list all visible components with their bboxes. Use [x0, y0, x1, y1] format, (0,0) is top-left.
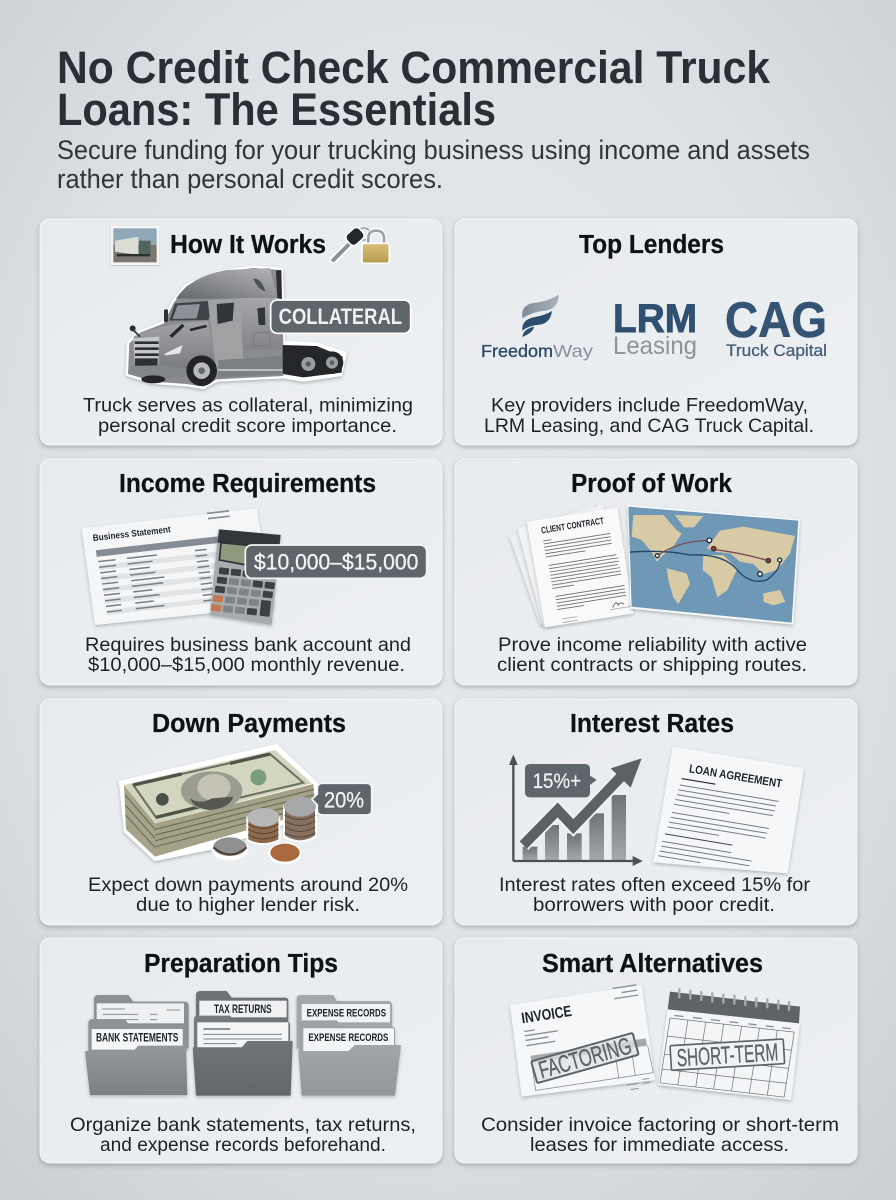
heading: interest rates: Interest Rates — [570, 710, 734, 738]
label: 20% — [312, 783, 372, 815]
panel: proof of work — [455, 459, 857, 685]
logo: FreedomWay: Freedom — [481, 341, 553, 361]
icon: truck photo — [111, 226, 159, 265]
calculator — [210, 529, 281, 625]
description: preparation tips: and expense records beforehand. — [100, 1134, 386, 1156]
invoice with factoring stamp — [510, 984, 655, 1104]
description: how it works — [83, 394, 413, 437]
description: income requirements — [85, 634, 411, 676]
logo: LRM Leasing: LRM — [613, 297, 697, 341]
illustration: contract and map — [509, 503, 803, 627]
label: revenue range: $10,000–$15,000 — [254, 549, 418, 574]
label: collateral — [271, 300, 411, 333]
logo: LRM Leasing: Leasing — [613, 332, 697, 360]
heading: proof of work: Proof of Work — [571, 470, 733, 498]
loan agreement document: LOAN AGREEMENT — [688, 762, 783, 791]
client contract stack: CLIENT CONTRACT — [540, 516, 605, 535]
illustration: statement and calculator — [82, 508, 427, 625]
truck — [128, 268, 344, 387]
description: preparation tips — [70, 1114, 416, 1156]
subtitle — [57, 135, 810, 194]
cash stack — [120, 745, 318, 860]
description: income requirements: Requires business bank account and — [85, 634, 411, 656]
description: proof of work — [497, 634, 807, 676]
logo: CAG Truck Capital: Truck Capital — [726, 342, 827, 360]
subtitle: rather than personal credit scores. — [57, 164, 443, 194]
folder: expense records: EXPENSE RECORDS — [307, 1007, 386, 1019]
shipping route map — [627, 503, 803, 627]
label: 15%+ — [525, 764, 597, 797]
description: top lenders: Key providers include FreedomWay, — [491, 394, 808, 416]
description: interest rates: borrowers with poor credit. — [533, 894, 775, 916]
description: down payments — [88, 874, 408, 916]
description: interest rates: Interest rates often exceed 15% for — [499, 874, 811, 896]
title line 2: Loans: The Essentials — [57, 84, 496, 135]
title: No Credit Check Commercial Truck — [57, 42, 771, 93]
description: top lenders — [484, 394, 814, 437]
folder: tax returns — [193, 991, 293, 1096]
description: proof of work: client contracts or shipping routes. — [497, 654, 807, 676]
business statement document — [82, 508, 273, 625]
invoice with factoring stamp: FACTORING — [536, 1033, 635, 1084]
panel: top lenders — [455, 219, 857, 445]
illustration: cash and coins — [120, 745, 372, 864]
heading: down payments: Down Payments — [152, 710, 346, 738]
description: down payments: Expect down payments around 20% — [88, 874, 408, 896]
description: smart alternatives — [481, 1114, 839, 1156]
client contract stack — [509, 503, 633, 627]
description: how it works: Truck serves as collateral, minimizing — [83, 394, 413, 416]
heading: how it works: How It Works — [170, 231, 326, 259]
panel: down payments — [40, 699, 442, 925]
panel: smart alternatives — [455, 938, 857, 1163]
loan agreement document — [653, 747, 804, 874]
description: smart alternatives: Consider invoice factoring or short-term — [481, 1114, 839, 1136]
description: how it works: personal credit score importance. — [98, 415, 397, 437]
description: proof of work: Prove income reliability with active — [498, 634, 807, 656]
panel: preparation tips — [40, 938, 442, 1163]
heading: smart alternatives: Smart Alternatives — [542, 950, 763, 978]
subtitle: Secure funding for your trucking business using income and assets — [57, 135, 810, 165]
calendar with short-term stamp — [658, 989, 800, 1100]
logo: FreedomWay: Way — [553, 341, 593, 361]
label: 20%: 20% — [324, 787, 364, 812]
illustration: file folders — [85, 991, 401, 1096]
logo: LRM Leasing — [613, 297, 697, 360]
folder: expense records: EXPENSE RECORDS — [308, 1032, 389, 1044]
description: income requirements: $10,000–$15,000 monthly revenue. — [88, 654, 405, 676]
folder: tax returns: TAX RETURNS — [214, 1003, 272, 1016]
panel: how it works — [40, 219, 442, 445]
illustration: truck as collateral — [128, 268, 411, 387]
folder: bank statements — [85, 995, 189, 1095]
icon: key and padlock — [333, 225, 389, 263]
invoice with factoring stamp: INVOICE — [520, 1003, 573, 1027]
illustration: rate chart and agreement — [509, 747, 804, 874]
description: down payments: due to higher lender risk. — [136, 894, 360, 916]
description: preparation tips: Organize bank statements, tax returns, — [70, 1114, 416, 1136]
coin stacks — [211, 797, 316, 864]
description: interest rates — [499, 874, 811, 916]
rising rate chart — [509, 754, 643, 866]
calendar with short-term stamp: SHORT-TERM — [676, 1039, 779, 1072]
heading: top lenders: Top Lenders — [579, 231, 724, 259]
logo: CAG Truck Capital: CAG — [725, 292, 827, 348]
illustration: invoice and calendar — [510, 984, 800, 1104]
logo: FreedomWay — [481, 294, 593, 361]
panel: income requirements — [40, 459, 442, 685]
panel: interest rates — [455, 699, 857, 925]
folder: bank statements: BANK STATEMENTS — [96, 1032, 178, 1045]
label: collateral: COLLATERAL — [279, 304, 402, 329]
heading: preparation tips: Preparation Tips — [144, 950, 338, 978]
folder: expense records — [297, 995, 401, 1096]
business statement document: Business Statement — [92, 524, 171, 543]
heading: income requirements: Income Requirements — [119, 470, 376, 498]
label: 15%+: 15%+ — [533, 769, 581, 793]
description: smart alternatives: leases for immediate access. — [530, 1134, 789, 1156]
description: top lenders: LRM Leasing, and CAG Truck Capital. — [484, 415, 814, 437]
